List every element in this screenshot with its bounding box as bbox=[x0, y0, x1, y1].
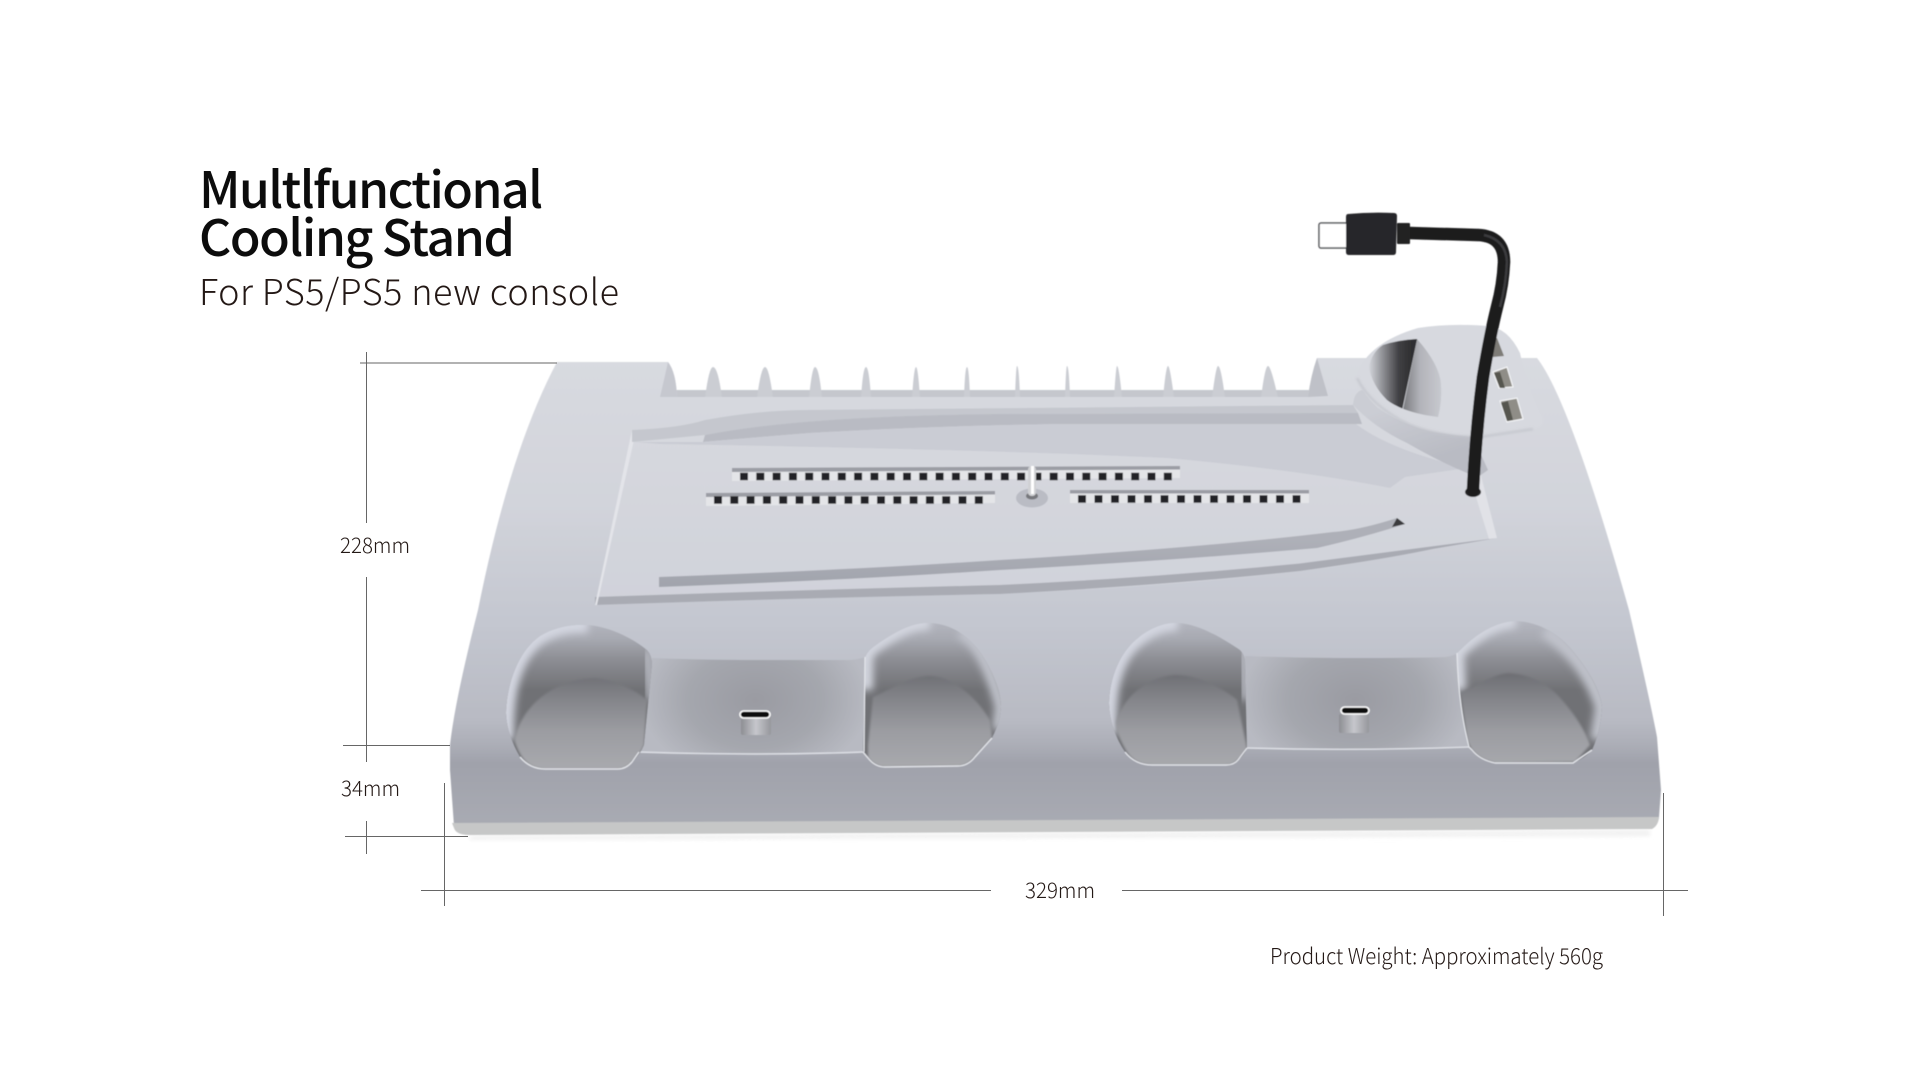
controller well 3 bbox=[1105, 620, 1250, 770]
ground shadow bbox=[470, 830, 1650, 840]
tray right facet bbox=[1467, 468, 1497, 539]
controller well 1 bbox=[506, 625, 652, 770]
body silhouette bbox=[450, 358, 1661, 834]
slot squares bbox=[740, 473, 1176, 480]
top ridge bands bbox=[632, 405, 1358, 442]
front bottom strip bbox=[452, 817, 1659, 835]
product: cooling stand bbox=[450, 213, 1661, 840]
vent slots bbox=[706, 466, 1309, 506]
controller well 2 bbox=[860, 620, 1005, 770]
hub top plate bbox=[1357, 325, 1543, 436]
lower tray lip bbox=[595, 538, 1497, 605]
left end tab shading bbox=[660, 362, 677, 397]
connector neck bbox=[1397, 223, 1410, 244]
dimension: 34mm bbox=[341, 773, 468, 854]
title: Cooling Stand bbox=[199, 199, 515, 271]
USB hub bbox=[1353, 325, 1543, 477]
centre pin bbox=[1016, 466, 1048, 508]
USB-C cable bbox=[1319, 213, 1507, 490]
dimension: 34mm: 34mm bbox=[341, 773, 400, 803]
charging pad 2 bbox=[1245, 654, 1469, 749]
right end tab shading bbox=[1308, 358, 1328, 397]
recessed dark plane bbox=[634, 424, 1467, 488]
USB-C plug 2 bbox=[1339, 707, 1369, 733]
charging pad 1 bbox=[639, 657, 865, 754]
cooling fins bbox=[705, 366, 1278, 398]
curved slit bbox=[659, 518, 1405, 587]
dimension: 228mm bbox=[340, 352, 557, 762]
connector housing bbox=[1346, 213, 1397, 255]
USB-C plug 1 bbox=[740, 711, 771, 735]
title: Multlfunctional bbox=[199, 151, 543, 223]
dimension: 228mm: 228mm bbox=[340, 530, 410, 560]
USB ports bbox=[1485, 338, 1523, 422]
charging cup bbox=[1370, 338, 1441, 417]
connector metal tip bbox=[1319, 223, 1348, 248]
fin strip bbox=[670, 390, 1320, 398]
hub ramp bbox=[1353, 390, 1488, 477]
recessed tray bbox=[595, 405, 1497, 605]
subtitle: For PS5/PS5 new console bbox=[199, 264, 619, 316]
dimension: 329mm bbox=[421, 783, 1688, 916]
cable hole bbox=[1465, 487, 1481, 497]
controller well 4 bbox=[1456, 622, 1598, 764]
dimension: 329mm: 329mm bbox=[1025, 875, 1095, 905]
product weight note: Product Weight: Approximately 560g bbox=[1270, 939, 1603, 971]
title bbox=[199, 151, 543, 271]
